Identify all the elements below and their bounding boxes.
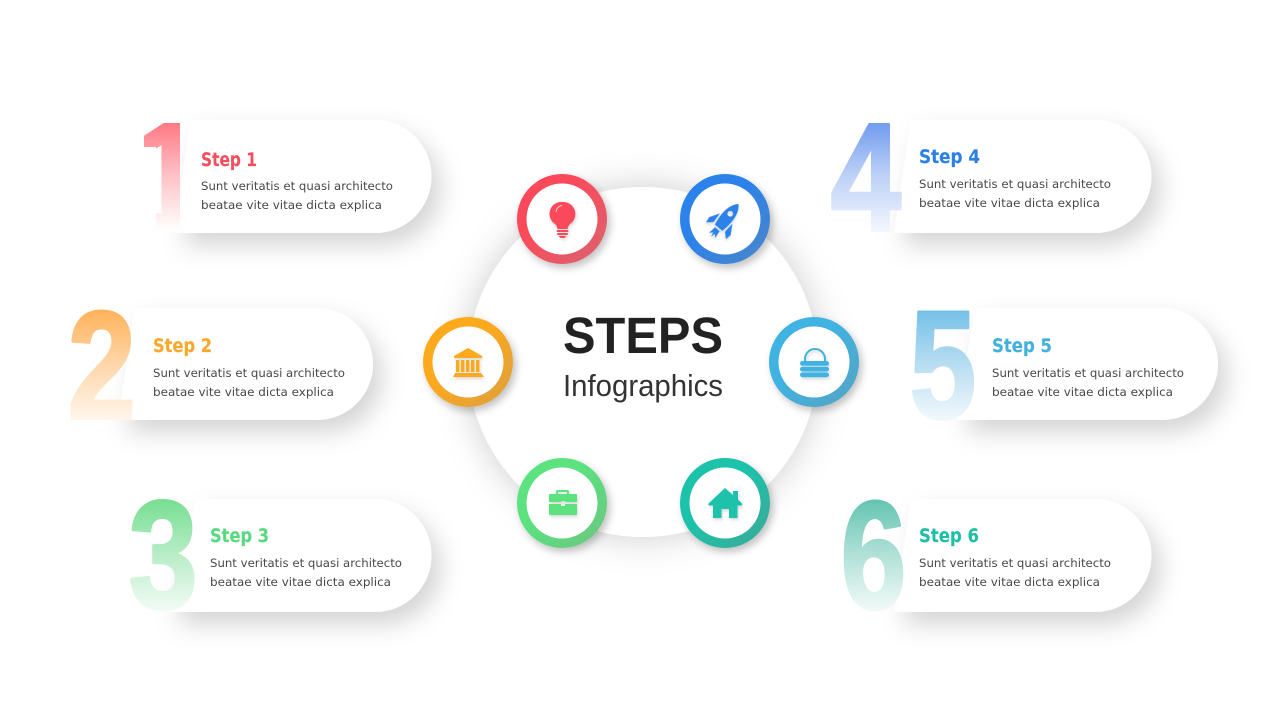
card 3 <box>168 499 432 612</box>
central circle <box>468 187 818 537</box>
icon: briefcase <box>549 490 577 515</box>
step 5 heading: Step 5 <box>992 335 1052 357</box>
icon ring: house <box>680 458 770 548</box>
step 4 heading: Step 4 <box>919 146 980 168</box>
step 2 description <box>153 366 345 399</box>
step 5 description: beatae vite vitae dicta explica <box>992 385 1173 399</box>
numeral 5: 5 <box>910 280 976 451</box>
step 4 description: beatae vite vitae dicta explica <box>919 196 1100 210</box>
step 6 description: Sunt veritatis et quasi architecto <box>919 556 1111 570</box>
step 1 description: Sunt veritatis et quasi architecto <box>201 179 393 193</box>
icon ring: lock <box>769 317 859 407</box>
card 4 <box>894 120 1152 233</box>
card 1 <box>175 120 432 233</box>
panel: step 5 <box>910 280 1218 451</box>
numeral 6: 6 <box>840 471 906 642</box>
numeral 3: 3 <box>128 468 198 641</box>
numeral 4: 4 <box>830 91 901 263</box>
step 5 description: Sunt veritatis et quasi architecto <box>992 366 1184 380</box>
icon: bank <box>453 348 484 377</box>
panel: step 6 <box>840 471 1152 642</box>
subtitle: Infographics <box>563 368 723 403</box>
step 2 description: beatae vite vitae dicta explica <box>153 385 334 399</box>
icon: lightbulb <box>549 202 575 238</box>
step 3 description <box>210 556 402 589</box>
card 2 <box>118 308 373 420</box>
title: STEPS <box>563 307 723 364</box>
numeral 2: 2 <box>68 279 136 452</box>
icon: lock <box>800 349 829 377</box>
panel: step 2 <box>68 279 373 452</box>
step 2 description: Sunt veritatis et quasi architecto <box>153 366 345 380</box>
step 3 description: beatae vite vitae dicta explica <box>210 575 391 589</box>
icon ring: lightbulb <box>517 174 607 264</box>
step 6 description <box>919 556 1111 589</box>
icon: house <box>708 488 742 518</box>
icon: rocket <box>700 195 749 246</box>
panel: step 4 <box>830 91 1152 263</box>
card 5 <box>957 308 1218 420</box>
icon ring: rocket <box>680 174 770 264</box>
step 1 heading: Step 1 <box>201 149 257 171</box>
step 5 description <box>992 366 1184 399</box>
step 3 description: Sunt veritatis et quasi architecto <box>210 556 402 570</box>
step 1 description <box>201 179 393 212</box>
card 6 <box>894 499 1152 612</box>
step 6 description: beatae vite vitae dicta explica <box>919 575 1100 589</box>
step 6 heading: Step 6 <box>919 525 979 547</box>
step 4 description: Sunt veritatis et quasi architecto <box>919 177 1111 191</box>
step 4 description <box>919 177 1111 210</box>
numeral 1: 1 <box>127 92 213 264</box>
step 1 description: beatae vite vitae dicta explica <box>201 198 382 212</box>
icon ring: briefcase <box>517 458 607 548</box>
panel: step 1 <box>144 123 450 255</box>
step 2 heading: Step 2 <box>153 335 212 357</box>
icon ring: bank <box>423 317 513 407</box>
step 3 heading: Step 3 <box>210 525 269 547</box>
panel: step 3 <box>128 468 432 641</box>
